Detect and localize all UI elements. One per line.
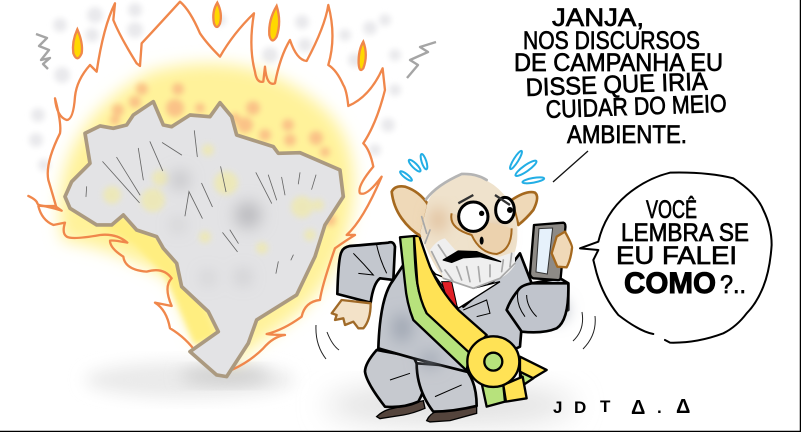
left jacket arm <box>337 242 395 303</box>
jacket fold lines <box>353 245 537 397</box>
signature: T <box>600 397 611 416</box>
bubble text: EU FALEI <box>616 242 737 270</box>
phone <box>530 223 565 280</box>
legs <box>365 350 477 412</box>
map of Brazil <box>65 102 343 377</box>
map tint <box>103 144 324 254</box>
eyes <box>459 197 514 231</box>
shirt collar <box>433 273 500 308</box>
right hand <box>552 232 572 267</box>
speech bubble <box>580 173 772 343</box>
hair <box>426 174 487 199</box>
map shading <box>172 172 261 283</box>
bubble text: ?.. <box>720 271 746 299</box>
signature: . <box>657 398 662 417</box>
upper speech text: DE CAMPANHA EU <box>514 49 723 77</box>
head <box>420 175 517 287</box>
smoke squiggles <box>36 34 436 78</box>
jacket arm sleeve <box>507 283 568 332</box>
ears <box>392 186 537 236</box>
signature: J <box>553 398 562 417</box>
flame outline <box>28 2 385 370</box>
pupils and brows <box>458 195 513 245</box>
beard hatching <box>422 217 515 288</box>
signature: Δ <box>631 397 645 419</box>
flame sparks <box>73 3 366 70</box>
bubble text <box>616 195 749 300</box>
dialogue pointer line <box>553 151 588 182</box>
bubble text: LEMBRA SE <box>621 219 749 247</box>
signature <box>553 396 690 419</box>
red tie <box>442 282 457 307</box>
bubble text: VOCÊ <box>646 195 697 224</box>
presidential sash <box>400 236 547 407</box>
jacket torso <box>378 250 568 372</box>
sweat drops <box>399 150 545 185</box>
beard <box>430 238 515 288</box>
jacket shading <box>393 300 567 367</box>
upper speech text <box>514 4 727 149</box>
upper speech text: DISSE QUE IRIA <box>525 68 708 102</box>
bubble text: COMO <box>624 267 716 300</box>
motion lines <box>316 312 595 359</box>
upper speech text: JANJA, <box>552 4 644 32</box>
mouth <box>443 251 501 262</box>
signature: Δ <box>676 396 690 418</box>
phone screen <box>536 228 553 274</box>
upper speech text: CUIDAR DO MEIO <box>545 90 727 124</box>
signature: D <box>574 398 586 417</box>
nose and face lines <box>451 213 512 254</box>
fire glow <box>60 64 354 365</box>
shoes <box>377 401 477 422</box>
cheek shading <box>431 208 505 247</box>
president figure <box>332 150 572 422</box>
map hatch marks <box>86 131 316 273</box>
smoke <box>29 3 401 171</box>
left hand <box>332 300 371 328</box>
upper speech text: AMBIENTE. <box>567 121 687 149</box>
ground shadows <box>85 362 575 426</box>
upper speech text: NOS DISCURSOS <box>523 27 700 55</box>
embers <box>110 83 336 226</box>
